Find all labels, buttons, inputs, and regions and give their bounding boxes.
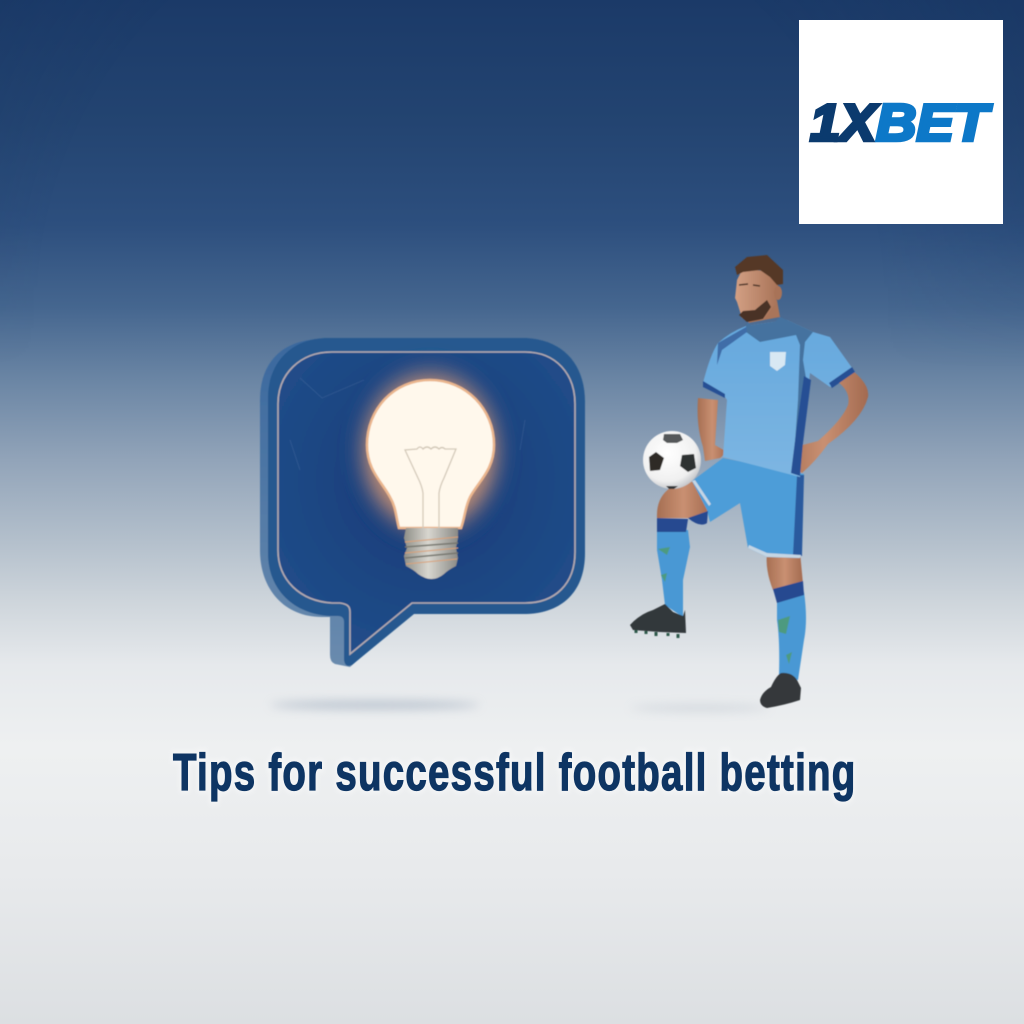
raised thigh [657,481,710,518]
raised sock [657,518,690,617]
bubble inner panel [278,352,575,654]
bubble front face [268,338,585,666]
title: Tips for successful football betting [173,743,855,801]
jersey [703,320,855,477]
bubble extruded side [260,339,577,667]
logo panel [799,20,1003,224]
left arm [698,398,727,461]
head [735,255,787,341]
logo text [810,94,993,152]
bulb glass [367,380,494,528]
bulb filament [405,447,456,528]
standing boot [760,673,801,708]
bulb screw base [404,528,458,579]
logo text: BET [876,94,993,152]
raised boot [630,604,686,638]
speech bubble with light bulb [260,338,585,667]
standing leg [767,552,803,590]
logo text: 1X [810,94,879,152]
title: Tips for successful football betting [173,743,855,801]
floor shadows [270,701,770,711]
panel scratches [290,378,525,470]
football player [630,255,868,708]
bulb glow [344,352,516,552]
football [643,431,701,489]
shorts [688,458,804,558]
standing sock [773,581,806,680]
right arm and hand [780,371,868,473]
